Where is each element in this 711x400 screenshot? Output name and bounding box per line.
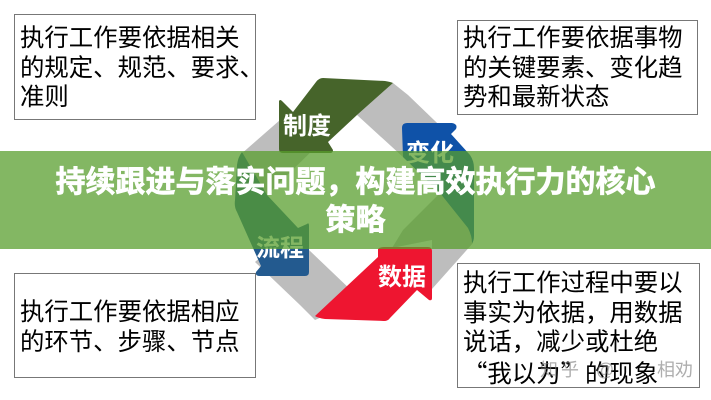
arrow: 流程: [235, 152, 309, 276]
title: 策略: [326, 204, 386, 237]
label: 数据: 数据: [378, 264, 426, 291]
text box: top right: [457, 20, 698, 115]
text box: bottom right: 事实为依据，用数据: [463, 300, 683, 327]
gray connector: top right: [357, 83, 473, 232]
gray connector: bottom left: [255, 240, 353, 320]
watermark: @: [596, 360, 614, 380]
text box: bottom right: [457, 263, 700, 388]
arrow: 数据: [315, 247, 432, 321]
watermark: [540, 360, 693, 380]
label: 流程: 流程: [256, 235, 304, 262]
text box: bottom left: 的环节、步骤、节点: [20, 329, 240, 356]
gray connector: top left: [240, 120, 320, 195]
text box: bottom right: 说话，减少或杜绝: [463, 329, 658, 356]
gray connector: bottom right: [392, 193, 473, 289]
watermark: 知: [540, 360, 558, 380]
text box: top right: 的关键要素、变化趋: [463, 55, 683, 82]
text box: top left: 准则: [20, 84, 69, 111]
label: 变化: 变化: [406, 139, 454, 167]
label: 制度: 制度: [283, 113, 331, 140]
title: 持续跟进与落实问题，构建高效执行力的核心: [56, 166, 656, 199]
title band: [0, 151, 711, 249]
text box: bottom left: 执行工作要依据相应: [20, 299, 240, 326]
text box: top left: 执行工作要依据相关: [20, 25, 240, 52]
title: [56, 165, 656, 237]
watermark: 相劝: [657, 360, 693, 380]
text box: top left: [14, 14, 256, 120]
text box: bottom right: “我以为”的现象: [463, 355, 658, 390]
text box: top right: 执行工作要依据事物: [463, 25, 683, 52]
text box: top right: 势和最新状态: [463, 84, 609, 111]
text box: bottom left: [14, 273, 256, 378]
text box: bottom right: 执行工作过程中要以: [463, 270, 683, 297]
watermark: 乎: [561, 360, 579, 380]
text box: top left: 的规定、规范、要求、: [20, 55, 264, 82]
arrow: 变化: [402, 123, 474, 243]
arrow: 制度: [279, 78, 393, 153]
